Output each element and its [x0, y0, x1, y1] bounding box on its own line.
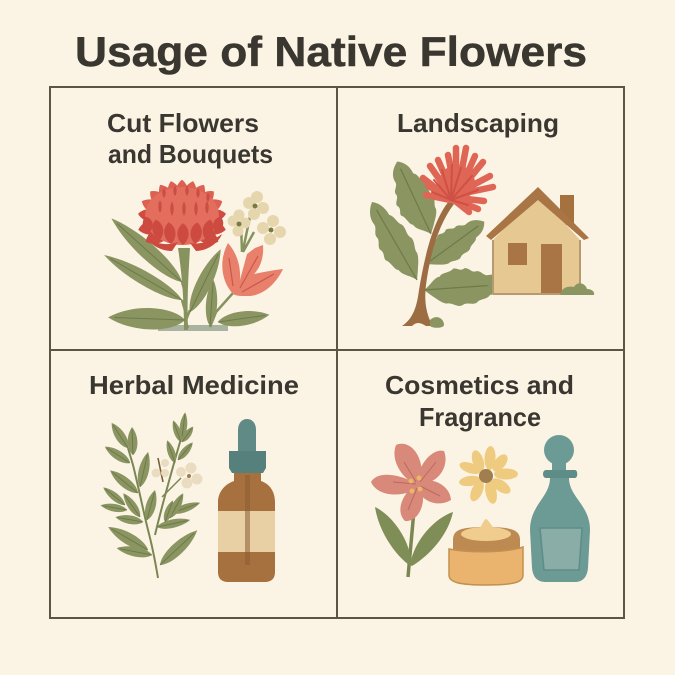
heading: herbal medicine: Herbal Medicine: [89, 370, 299, 400]
illustration: pink lily: [371, 444, 453, 577]
red spiky flower head: [423, 148, 493, 212]
illustration: cream jar: [449, 519, 523, 585]
title: Usage of Native Flowers: [75, 28, 587, 75]
illustration: red protea bouquet: [101, 179, 286, 331]
panel: cut flowers and bouquets: [101, 108, 286, 331]
heading: cosmetics and fragrance: Fragrance: [419, 402, 541, 432]
small cream flowers: [228, 191, 286, 252]
illustration: perfume bottle: [530, 435, 590, 582]
panel: cosmetics and fragrance: [371, 370, 590, 585]
heading: landscaping: Landscaping: [397, 108, 559, 138]
heading: cut flowers: Cut Flowers: [107, 108, 259, 138]
pink tulip: [222, 243, 283, 296]
cream blossoms: [152, 458, 202, 497]
heading: cut flowers: and Bouquets: [108, 139, 273, 169]
panel: landscaping: [357, 108, 594, 328]
panel: herbal medicine: [89, 370, 299, 582]
illustration: herb sprig: [100, 412, 202, 578]
illustration: flower plant: [357, 148, 509, 328]
illustration: cottage: [486, 187, 594, 295]
protea head: [137, 179, 227, 251]
illustration: amber dropper bottle: [218, 419, 275, 582]
grid frame: [50, 87, 624, 618]
illustration: yellow daisy: [458, 446, 518, 505]
heading: cosmetics and fragrance: Cosmetics and: [385, 370, 574, 400]
